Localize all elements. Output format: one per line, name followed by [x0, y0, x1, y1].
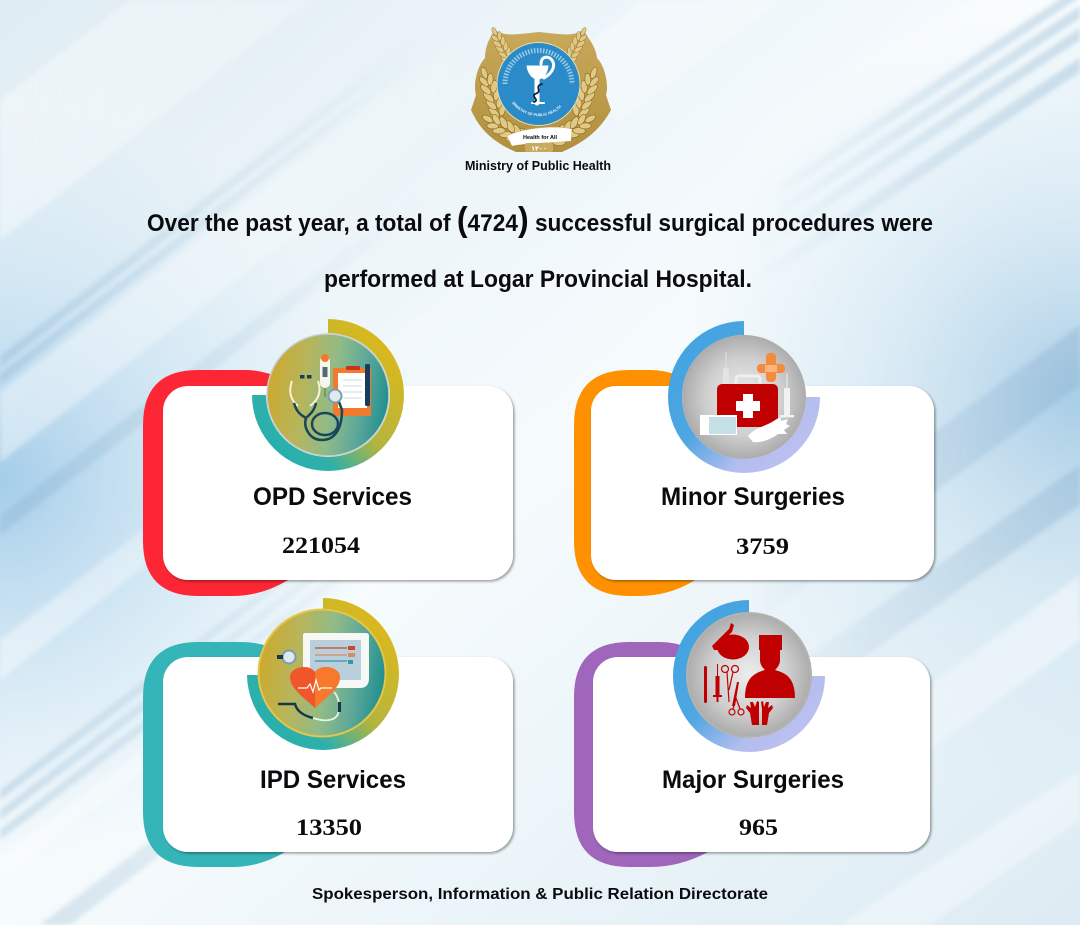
icon: monitor and heart [258, 610, 386, 736]
icon: three-quarter ring [247, 598, 399, 750]
panel: Minor Surgeries [574, 321, 934, 596]
icon: three-quarter ring [668, 321, 820, 473]
title line 1: Over the past year, a total of (4724) successful surgical procedures were [147, 201, 933, 239]
card [163, 657, 513, 852]
icon: bowl of Hygieia [527, 57, 554, 103]
heading: Major Surgeries: Major Surgeries [662, 766, 844, 794]
value: 221054: 221054 [282, 533, 361, 558]
orange bracket [574, 370, 700, 596]
icon: left wheat ears [473, 24, 533, 151]
heading: OPD Services: OPD Services [253, 483, 412, 511]
footer credit: Spokesperson, Information & Public Relation Directorate [312, 886, 768, 903]
label: Ministry of Public Health: Ministry of Public Health [465, 159, 611, 173]
panel: Major Surgeries [574, 600, 930, 867]
value: 965: 965 [739, 815, 778, 840]
teal bracket [143, 642, 300, 867]
icon: surgeon and instruments [687, 613, 811, 737]
heading: IPD Services: IPD Services [260, 766, 406, 794]
emblem: Ministry of Public Health logo: MINISTRY OF PUBLIC HEALTH [512, 102, 562, 116]
medallion [525, 143, 553, 152]
red bracket [143, 370, 300, 596]
icon: three-quarter ring [673, 600, 825, 752]
card [593, 657, 930, 852]
banner: Health for All [507, 127, 572, 146]
gold wreath base [471, 30, 611, 152]
title line 2: performed at Logar Provincial Hospital. [324, 266, 752, 293]
icon: first aid kit [682, 335, 806, 459]
emblem: Ministry of Public Health logo [465, 27, 611, 173]
emblem: Ministry of Public Health logo: Health for All [523, 135, 557, 141]
panel: OPD Services [143, 319, 513, 596]
emblem: Ministry of Public Health logo: ۱۴۰۰ [531, 146, 547, 152]
value: 3759: 3759 [736, 534, 789, 559]
title [147, 201, 933, 293]
icon: red crescent [536, 26, 541, 36]
icon: stethoscope and clipboard [267, 334, 389, 456]
card [591, 386, 934, 580]
panel: IPD Services [143, 598, 513, 867]
value: 13350: 13350 [296, 815, 362, 840]
icon: right wheat ears [545, 24, 605, 151]
purple bracket [574, 642, 720, 867]
icon: three-quarter ring [252, 319, 404, 471]
heading: Minor Surgeries: Minor Surgeries [661, 483, 845, 511]
card [163, 386, 513, 580]
icon: blue seal [497, 42, 580, 126]
